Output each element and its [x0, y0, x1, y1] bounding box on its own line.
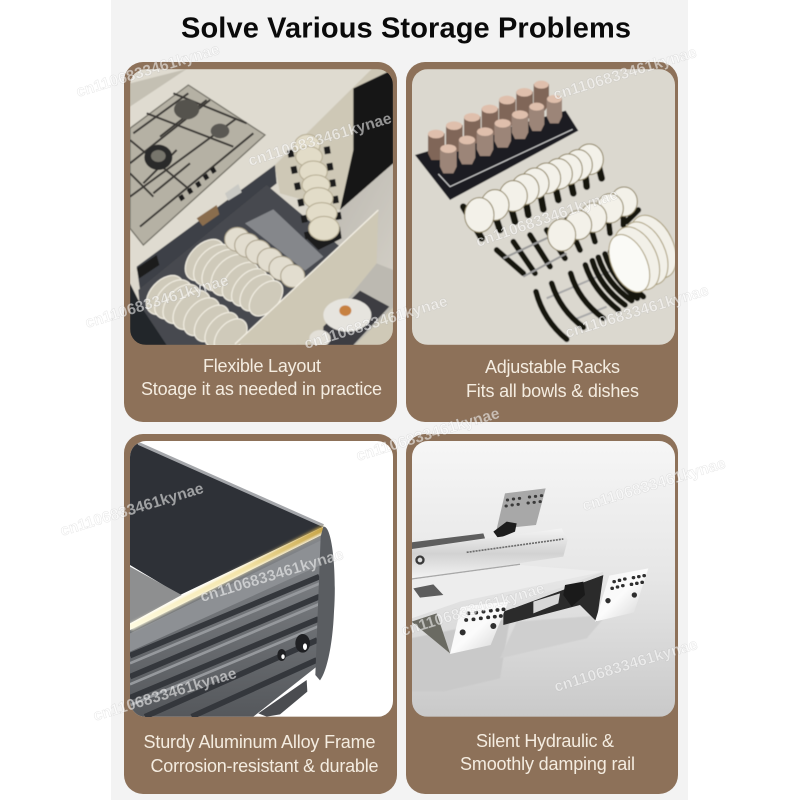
watermarks: cn1106833461kynae [474, 186, 621, 251]
fin body [130, 535, 322, 717]
watermarks: cn1106833461kynae [399, 580, 547, 640]
card background [406, 434, 678, 794]
caption [460, 731, 635, 774]
front bracket [450, 602, 508, 654]
panel: hydraulic rail [406, 434, 678, 794]
watermarks [58, 41, 728, 725]
photo: drawer corner [130, 441, 393, 717]
bowl row 2 and rack [497, 187, 638, 277]
watermarks: cn1106833461kynae [563, 282, 711, 342]
watermarks: cn1106833461kynae [246, 110, 394, 170]
caption [144, 732, 378, 776]
bowls in drawer [225, 227, 305, 287]
upper bracket [497, 488, 546, 529]
front panel [240, 230, 376, 345]
photo: drawer rails [410, 441, 677, 717]
watermarks: cn1106833461kynae [302, 293, 450, 353]
watermarks: cn1106833461kynae [74, 41, 222, 101]
watermarks: cn1106833461kynae [551, 44, 699, 104]
caption: Flexible Layout [203, 356, 321, 376]
end cap [315, 527, 335, 680]
plates [144, 238, 284, 345]
watermarks: cn1106833461kynae [58, 480, 206, 540]
dark channel [412, 613, 450, 653]
watermarks: cn1106833461kynae [354, 405, 502, 465]
caption [141, 356, 382, 399]
back bracket [595, 568, 648, 622]
card background [406, 62, 678, 422]
caption: Silent Hydraulic & [476, 731, 614, 751]
caption: Corrosion-resistant & durable [150, 756, 378, 776]
middle rail [412, 565, 540, 618]
watermarks: cn1106833461kynae [580, 455, 728, 515]
caption: Fits all bowls & dishes [466, 381, 639, 401]
photo: racks with cups, bowls, plates [410, 69, 686, 345]
background column [111, 0, 688, 800]
photo: kitchen drawer with dishes [130, 69, 393, 359]
caption: Sturdy Aluminum Alloy Frame [144, 732, 376, 752]
watermarks: cn1106833461kynae [552, 636, 700, 696]
gold light strip [130, 529, 323, 628]
card background [124, 62, 397, 422]
black tray [415, 111, 578, 200]
watermarks: cn1106833461kynae [83, 272, 231, 332]
drawer interior [137, 165, 277, 290]
caption: Smoothly damping rail [460, 754, 635, 774]
watermarks: cn1106833461kynae [91, 665, 239, 725]
lower drawer and pot [323, 291, 389, 345]
plate rack [536, 208, 686, 339]
holes [295, 634, 310, 653]
caption [466, 357, 639, 401]
stove [130, 85, 265, 245]
caption: Adjustable Racks [485, 357, 620, 377]
bowl row 1 [463, 144, 603, 238]
card background [124, 434, 397, 794]
watermarks: cn1106833461kynae [198, 546, 346, 606]
caption: Stoage it as needed in practice [141, 379, 382, 399]
panel: aluminum frame [124, 434, 397, 794]
title: Solve Various Storage Problems [181, 12, 631, 44]
cups [428, 81, 562, 173]
panel: flexible layout [124, 62, 397, 422]
bracket [258, 680, 307, 717]
upper rail [412, 536, 566, 578]
upright bowl rack [290, 134, 342, 250]
panel: adjustable racks [406, 62, 686, 422]
